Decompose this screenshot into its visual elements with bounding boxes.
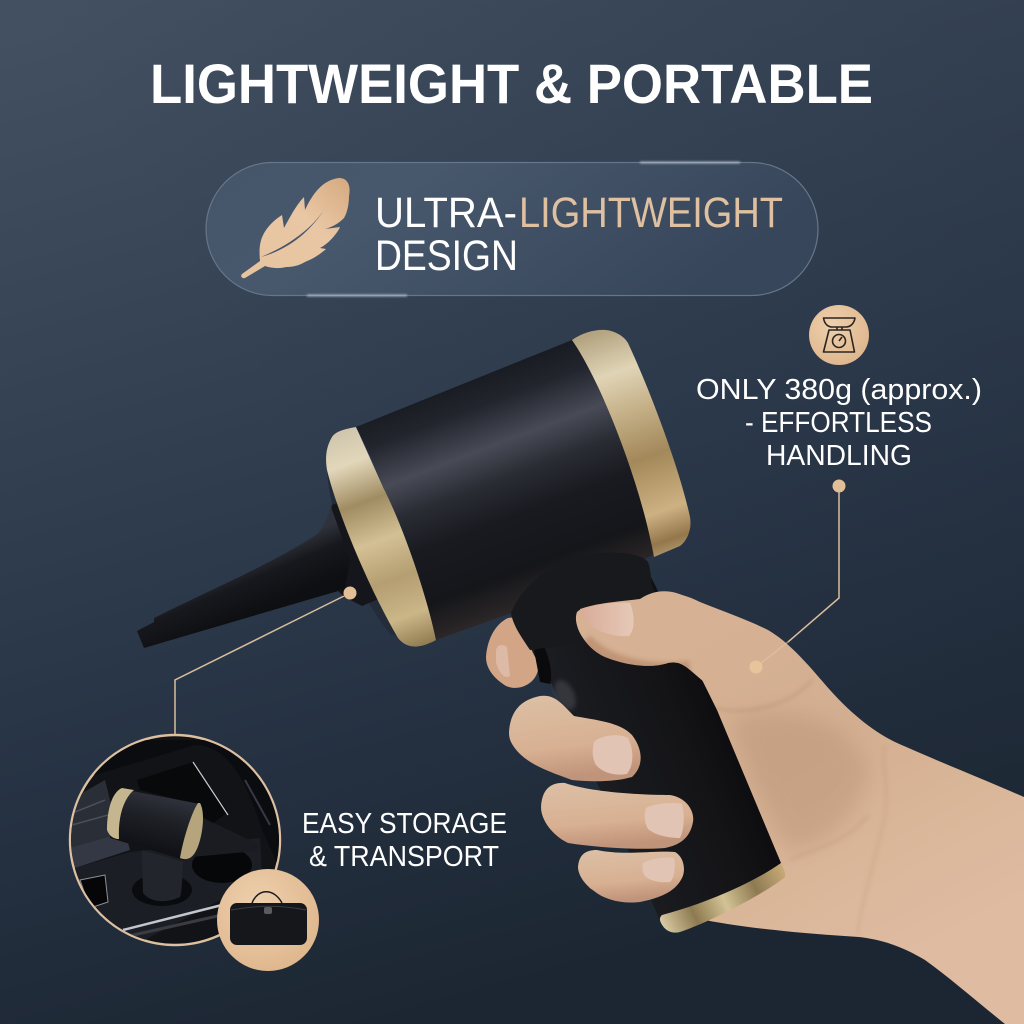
face of blower: [327, 440, 420, 640]
hand: middle finger: [509, 696, 641, 781]
text: ultra-lightweight design: DESIGN: [375, 232, 518, 280]
product: handle neck: [511, 553, 655, 650]
text: easy storage and transport: [302, 808, 507, 873]
panel: ultra-lightweight design pill: [206, 162, 818, 296]
text: easy storage and transport: & TRANSPORT: [309, 841, 499, 873]
mini blower nozzle: [196, 818, 246, 856]
callout dots on product and hand: [344, 586, 788, 674]
leader line: weight callout: [788, 480, 846, 642]
title: LIGHTWEIGHT & PORTABLE: [150, 52, 873, 115]
hand: ring finger: [541, 783, 693, 849]
leader line: storage callout: [175, 593, 350, 737]
right gold ring: [572, 330, 691, 557]
mini blower gold rings: [107, 788, 134, 839]
hand: thumb: [576, 591, 702, 681]
mini blower handle: [142, 850, 183, 901]
text: only 380g callout: ONLY 380g (approx.): [696, 374, 982, 406]
product: handle: [516, 575, 781, 923]
text: ultra-lightweight design: [375, 189, 783, 280]
text: easy storage and transport: EASY STORAGE: [302, 808, 507, 840]
nozzle: [137, 507, 350, 648]
text: ultra-lightweight design: ULTRA-: [375, 189, 517, 237]
nozzle hub: [326, 500, 381, 606]
panel: car interior photo circle: [70, 735, 280, 945]
mini blower body: [110, 789, 200, 860]
hand: palm and wrist: [640, 593, 1024, 1024]
icon: storage bag circle: [217, 869, 319, 971]
hand: little finger: [578, 850, 684, 903]
text: ultra-lightweight design: LIGHTWEIGHT: [519, 189, 783, 237]
body: [356, 340, 654, 640]
icon: kitchen scale: [809, 305, 869, 365]
text: only 380g callout: - EFFORTLESS: [745, 407, 932, 439]
text: only 380g callout: [696, 374, 982, 472]
thumb nail: [580, 603, 634, 636]
product: handle base ring: [660, 863, 785, 933]
product: blower head: [137, 330, 691, 648]
icon: feather: [241, 178, 350, 278]
text: only 380g callout: HANDLING: [766, 440, 912, 472]
hand: index finger: [486, 618, 539, 688]
left gold ring: [326, 427, 436, 647]
